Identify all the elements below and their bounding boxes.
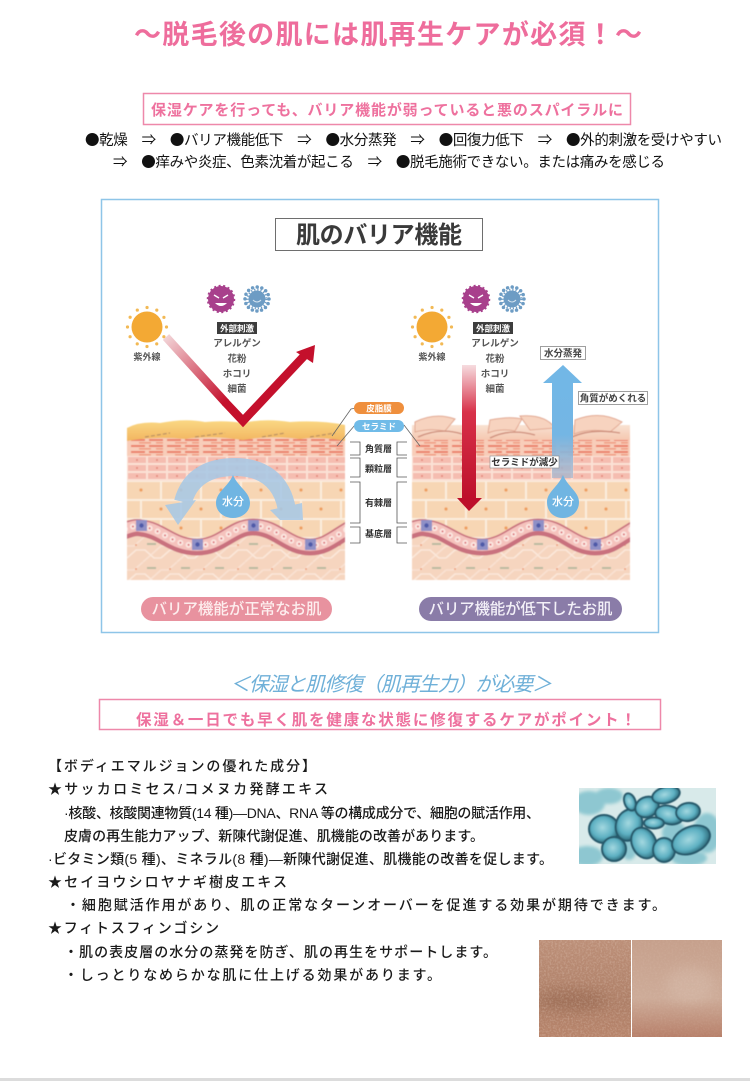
arrow: moisture circulating <box>165 467 303 525</box>
external stimuli list, right: ホコリ <box>481 369 509 380</box>
panel: damaged skin cross-section <box>402 415 640 580</box>
phytosphingosine detail 1: ・肌の表皮層の水分の蒸発を防ぎ、肌の再生をサポートします。 <box>64 944 497 960</box>
icon: water drop, healthy <box>216 475 250 518</box>
external stimuli list, right: 花粉 <box>485 353 505 365</box>
icon: purple germ, right <box>463 286 489 312</box>
label: sebum film: 皮脂膜 <box>366 404 392 414</box>
label pill: healthy barrier <box>141 597 332 621</box>
skin layer names with brackets: 角質層 <box>365 443 392 454</box>
icon: blue germ, right <box>500 287 524 311</box>
callout: vicious spiral: 保湿ケアを行っても、バリア機能が弱っていると悪のスパイラルに <box>151 101 623 119</box>
label pill: weakened barrier <box>419 597 622 621</box>
saccharomyces ingredient: ★サッカロミセス/コメヌカ発酵エキス <box>48 781 328 797</box>
icon: water drop, damaged <box>547 475 579 518</box>
icon: water drop, healthy: 水分 <box>222 494 244 508</box>
phytosphingosine ingredient: ★フィトスフィンゴシン <box>48 920 219 936</box>
external stimuli list, left: 花粉 <box>227 353 247 365</box>
external stimuli list, left: ホコリ <box>223 369 251 380</box>
icon: sun, right: 紫外線 <box>418 351 446 362</box>
nucleic acid detail: ·核酸、核酸関連物質(14 種)—DNA、RNA 等の構成成分で、細胞の賦活作用、 <box>64 805 540 821</box>
label: water evaporation: 水分蒸発 <box>544 348 582 360</box>
skin layer names with brackets: 有棘層 <box>365 497 392 508</box>
title: 〜脱毛後の肌には肌再生ケアが必須！〜 <box>134 19 642 50</box>
callout: vicious spiral <box>144 94 630 124</box>
callout: care point <box>100 700 660 730</box>
icon: sun, left <box>128 308 166 362</box>
arrow: water evaporating <box>543 365 582 478</box>
panel: skin barrier diagram <box>102 200 658 632</box>
arrow: deflected UV, healthy skin <box>166 337 315 421</box>
diagram heading <box>276 218 482 250</box>
skin layer names with brackets <box>350 442 407 543</box>
arrow: UV penetrating, damaged skin <box>457 365 482 511</box>
icon: water drop, damaged: 水分 <box>552 494 574 508</box>
label: ceramide <box>337 420 420 446</box>
vitamin detail: ·ビタミン類(5 種)、ミネラル(8 種)—新陳代謝促進、肌機能の改善を促します。 <box>48 851 553 867</box>
label pill: healthy barrier: バリア機能が正常なお肌 <box>152 599 322 618</box>
skin layer names with brackets: 顆粒層 <box>365 463 392 474</box>
skin layer names with brackets: 基底層 <box>365 528 392 539</box>
label: sebum film <box>332 402 404 436</box>
label pill: weakened barrier: バリア機能が低下したお肌 <box>428 599 613 618</box>
icon: sun, left: 紫外線 <box>133 351 161 362</box>
ingredient list <box>48 758 666 983</box>
icon: sun, right <box>412 308 452 362</box>
spiral steps text: ⇒ ●痒みや炎症、色素沈着が起こる ⇒ ●脱毛施術できない。または痛みを感じる <box>113 151 665 172</box>
phytosphingosine detail 2: ・しっとりなめらかな肌に仕上げる効果があります。 <box>64 967 441 983</box>
subheading: ＜保湿と肌修復（肌再生力）が必要＞ <box>230 673 552 696</box>
icon: purple germ, left <box>208 286 234 312</box>
spiral steps text: ●乾燥 ⇒ ●バリア機能低下 ⇒ ●水分蒸発 ⇒ ●回復力低下 ⇒ ●外的刺激を受けやすい <box>85 129 722 150</box>
external stimuli list, left: 外部刺激 <box>220 324 254 334</box>
external stimuli list, right <box>471 322 519 395</box>
callout: care point: 保湿＆一日でも早く肌を健康な状態に修復するケアがポイント！ <box>136 710 636 729</box>
external stimuli list, right: 外部刺激 <box>476 324 510 334</box>
regeneration detail: 皮膚の再生能力アップ、新陳代謝促進、肌機能の改善があります。 <box>64 828 484 844</box>
external stimuli list, left: アレルゲン <box>213 338 261 350</box>
spiral steps text <box>85 129 722 172</box>
label: stratum corneum peeling: 角質がめくれる <box>580 392 646 404</box>
label: ceramide: セラミド <box>362 422 396 432</box>
willow ingredient: ★セイヨウシロヤナギ樹皮エキス <box>48 874 287 890</box>
label: ceramide decrease: セラミドが減少 <box>491 456 558 468</box>
external stimuli list, left <box>213 322 261 395</box>
external stimuli list, right: 細菌 <box>485 383 505 395</box>
bottom edge strip <box>0 1078 750 1081</box>
ingredients heading: 【ボディエマルジョンの優れた成分】 <box>48 758 316 774</box>
diagram heading: 肌のバリア機能 <box>296 222 462 249</box>
photo: yeast cells <box>571 784 721 866</box>
panel: healthy skin cross-section <box>117 420 355 580</box>
icon: blue germ, left <box>245 287 269 311</box>
external stimuli list, right: アレルゲン <box>471 338 519 350</box>
willow detail: ・細胞賦活作用があり、肌の正常なターンオーバーを促進する効果が期待できます。 <box>66 897 666 913</box>
photo: skin comparison <box>538 940 722 1037</box>
external stimuli list, left: 細菌 <box>227 383 247 395</box>
